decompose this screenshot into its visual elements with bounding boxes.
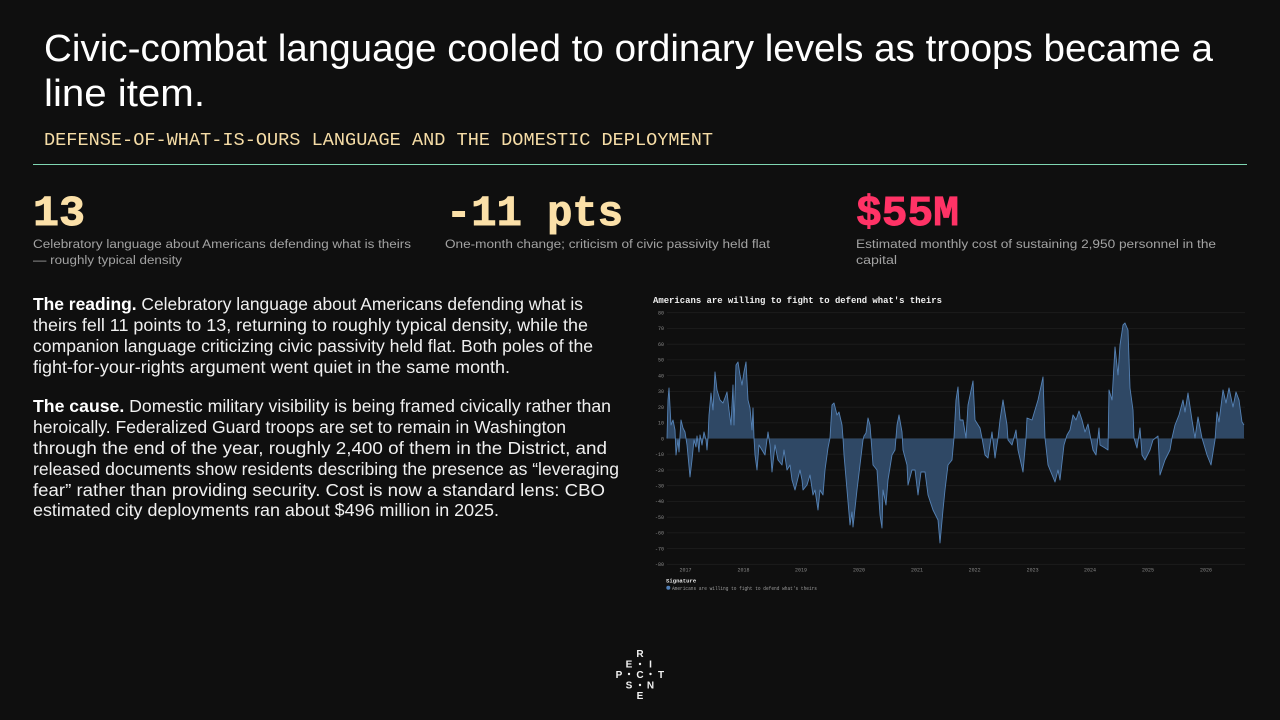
logo: Persistence: T: [658, 670, 664, 681]
logo: Persistence: E: [626, 660, 633, 670]
title: line item.: [44, 73, 205, 115]
chart: Americans are willing to fight: [653, 296, 1245, 592]
text block: the reading: fight-for-your-rights argument went quiet in the same month.: [33, 357, 510, 377]
y axis labels: 80: [658, 310, 664, 316]
logo: Persistence: P: [616, 670, 623, 681]
stat: 13: [33, 190, 411, 267]
text block: the reading: [33, 294, 593, 377]
y axis labels: 30: [658, 389, 664, 395]
text block: the reading: The reading. Celebratory language about Americans defending what is: [33, 294, 583, 314]
y axis labels: [655, 310, 664, 568]
legend: [666, 578, 817, 592]
y axis labels: 0: [661, 436, 664, 442]
x axis labels: 2026: [1200, 568, 1212, 574]
y axis labels: 60: [658, 342, 664, 348]
y axis labels: -10: [655, 452, 664, 458]
y axis labels: 70: [658, 326, 664, 332]
chart title: Americans are willing to fight to defend what's theirs: [653, 296, 942, 306]
x axis labels: 2019: [795, 568, 807, 574]
text block: the cause: estimated city deployments ran about $496 million in 2025.: [33, 500, 499, 520]
title: Civic-combat language cooled to ordinary levels as troops became a: [44, 28, 1214, 70]
logo: Persistence: I: [649, 660, 652, 670]
x axis labels: 2021: [911, 568, 923, 574]
y axis labels: -70: [655, 546, 664, 552]
text block: the cause: [33, 396, 619, 520]
logo: Persistence: R: [636, 649, 644, 660]
logo: Persistence: E: [637, 691, 644, 702]
text block: the cause: The cause. Domestic military visibility is being framed civically rather than: [33, 396, 611, 416]
y axis labels: -20: [655, 468, 664, 474]
stat: $55M: capital: [856, 253, 897, 267]
y axis labels: 10: [658, 421, 664, 427]
y axis labels: -30: [655, 484, 664, 490]
stat: -11 pts: One-month change; criticism of civic passivity held flat: [445, 237, 771, 251]
logo: Persistence: [616, 649, 664, 702]
y axis labels: -60: [655, 531, 664, 537]
legend: Signature: [666, 578, 697, 584]
subtitle: DEFENSE-OF-WHAT-IS-OURS LANGUAGE AND THE DOMESTIC DEPLOYMENT: [44, 130, 713, 151]
x axis labels: 2023: [1027, 568, 1039, 574]
logo: Persistence: N: [647, 680, 654, 692]
area series: [667, 323, 1244, 543]
stat: -11 pts: [445, 190, 771, 251]
stat: 13: 13: [33, 190, 85, 238]
x axis labels: [679, 568, 1212, 574]
stat: 13: — roughly typical density: [33, 253, 183, 267]
stat: $55M: [856, 190, 1216, 267]
line series: [667, 323, 1244, 543]
x axis labels: 2018: [737, 568, 750, 574]
y axis labels: -80: [655, 562, 664, 568]
text block: the cause: heroically. Federalized Guard troops are set to remain in Washington: [33, 417, 566, 437]
x axis labels: 2022: [969, 568, 981, 574]
y axis labels: 50: [658, 358, 664, 364]
y axis labels: -40: [655, 499, 664, 505]
stat: $55M: $55M: [856, 190, 959, 238]
stat: -11 pts: -11 pts: [446, 190, 623, 238]
stat: $55M: Estimated monthly cost of sustaining 2,950 personnel in the: [856, 237, 1216, 251]
x axis labels: 2020: [853, 568, 865, 574]
x axis labels: 2024: [1084, 568, 1096, 574]
x axis labels: 2025: [1142, 568, 1154, 574]
logo: Persistence: C: [636, 670, 644, 681]
text block: the reading: theirs fell 11 points to 13, returning to roughly typical density, while the: [33, 315, 588, 335]
y axis labels: -50: [655, 515, 664, 521]
text block: the cause: released documents show residents describing the presence as “leveraging: [33, 459, 619, 479]
x axis labels: 2017: [679, 568, 692, 574]
title: [44, 28, 1214, 115]
logo: Persistence: S: [626, 680, 633, 692]
stat: 13: Celebratory language about Americans defending what is theirs: [33, 237, 411, 251]
text block: the reading: companion language criticizing civic passivity held flat. Both poles of the: [33, 336, 593, 356]
y axis labels: 20: [658, 405, 664, 411]
text block: the cause: fear” rather than providing security. Cost is now a standard lens: CBO: [33, 480, 605, 500]
legend: Americans are willing to fight to defend what's theirs: [672, 586, 817, 592]
y axis labels: 40: [658, 373, 664, 379]
text block: the cause: through the end of the year, roughly 2,400 of them in the District, and: [33, 438, 607, 458]
